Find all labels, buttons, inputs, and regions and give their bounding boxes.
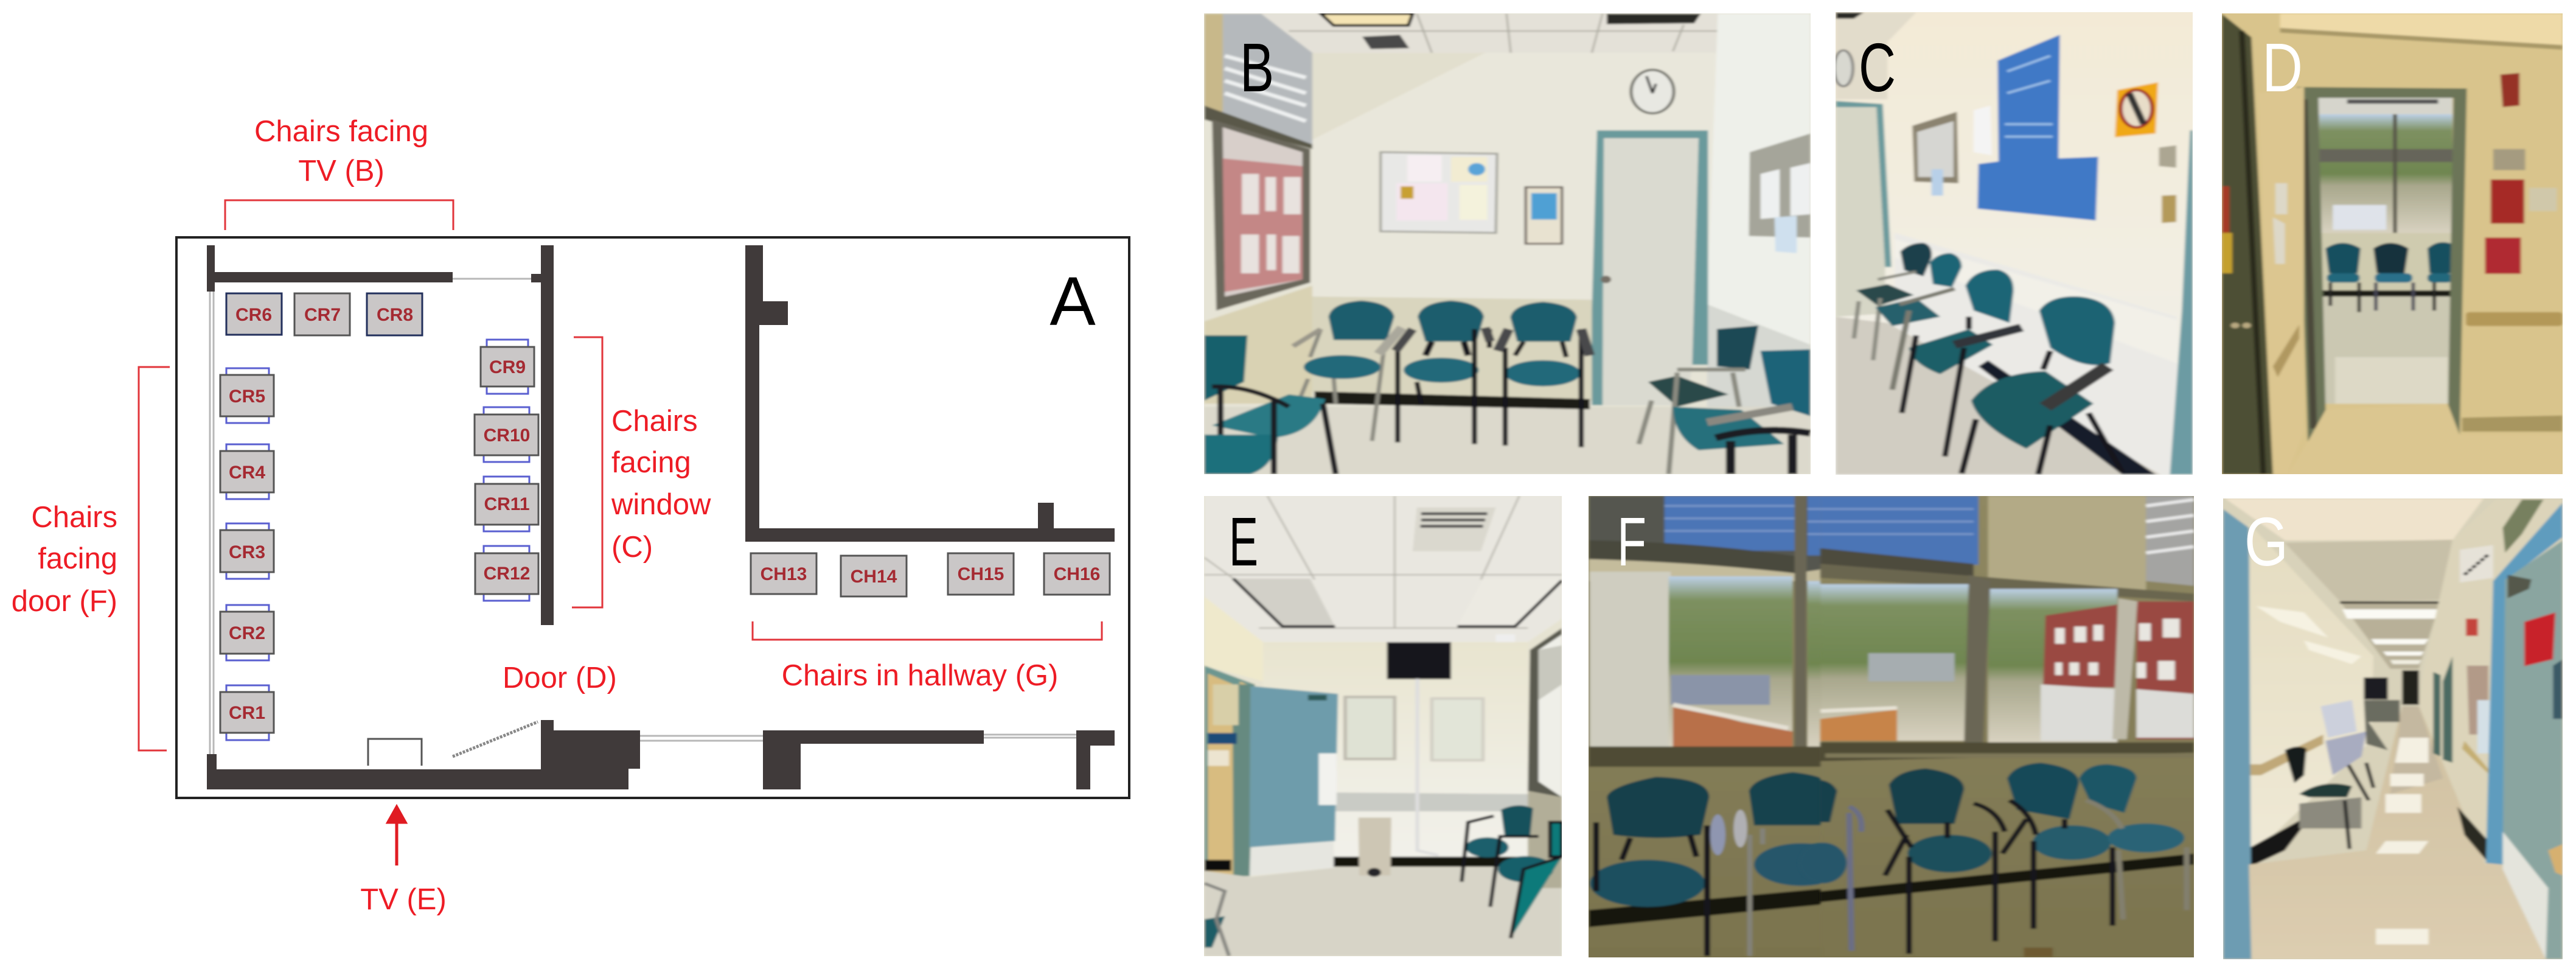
left half [1583,490,1865,963]
bracket: chairs facing window [572,337,602,607]
mullions [1964,575,1991,744]
far chairs [2325,243,2361,273]
chairs facing door: CR1 to CR5 [220,368,274,740]
arrow to TV [388,807,405,865]
label: TV: TV (E) [360,883,447,916]
floor plan frame [176,237,1129,798]
chairs in hallway: CH13 to CH16: CH16 [1054,564,1100,584]
left window with blind [1221,13,1314,145]
framed pictures [1345,697,1394,759]
label: chairs facing door: facing [38,542,117,575]
bracket: chairs in hallway [753,621,1102,640]
ceiling [1204,496,1562,642]
blinds [1820,496,1979,565]
handrail, baseboard and floor [2466,312,2563,326]
right half [1799,490,2199,963]
window view and column [1590,572,1671,747]
far room [2320,232,2453,292]
door frame [2297,87,2467,444]
chairs facing door: CR1 to CR5: CR4 [229,463,265,483]
clock [1631,70,1674,113]
panel letter E: E [1229,503,1258,580]
panel letter F: F [1617,503,1646,580]
chairs facing door: CR1 to CR5: CR2 [229,623,265,643]
label: chairs facing window: facing [611,446,691,479]
chairs facing window: CR9 to CR12: CR10 [484,425,530,446]
blue poster [1977,35,2098,220]
sill and baseboard [1820,743,2194,761]
chairs in hallway: CH13 to CH16: CH14 [851,567,897,587]
windows, door swing and trash outline [210,279,1076,766]
panel D: photo of door [2218,9,2567,478]
left opening and door [1204,666,1255,875]
left wall [2247,523,2373,860]
door [1592,130,1708,405]
walls [207,245,1115,789]
panel C: photo of chairs facing window [1830,9,2199,478]
left wall and back wall [1204,596,1263,681]
baseboard and floor [1334,857,1528,867]
label: chairs facing TV: TV (B) [298,155,385,187]
TV [1387,642,1451,679]
right door [2486,503,2563,864]
chairs in hallway: CH13 to CH16: CH13 [761,564,807,584]
lower walls and wainscot [1204,285,1312,404]
chairs [1501,805,1533,838]
chairs facing TV: CR6, CR7, CR8: CR6 [235,305,272,325]
panel G: photo of hallway [2220,495,2567,962]
no phone sign [2115,82,2158,138]
chairs in hallway: CH13 to CH16: CH15 [958,564,1004,584]
panel A: floor plan [12,115,1129,916]
exit sign and hanging sign [2460,545,2493,582]
notice board, paper and switches [1912,112,1958,183]
panel E: photo of TV wall [1199,490,1566,960]
chairs [1901,243,1932,276]
label: chairs facing window: Chairs [611,405,698,438]
blinds [1589,496,1862,581]
chairs facing TV: CR6, CR7, CR8: CR8 [377,305,413,325]
left door frame [2223,509,2251,959]
chairs facing window: CR9 to CR12: CR9 [489,357,526,377]
back wall and ceiling [1312,53,1718,301]
chairs and equipment [2285,747,2306,783]
trash bin [1359,817,1391,875]
chairs [1607,777,1709,838]
chairs facing window: CR9 to CR12 [475,340,538,601]
bracket: chairs facing door [139,367,170,750]
left door [1836,101,1892,267]
panel letter C: C [1859,29,1896,106]
right wall signage [2501,73,2519,107]
ceiling [2225,498,2484,540]
chairs facing window: CR9 to CR12: CR11 [484,494,530,514]
floor [2249,707,2548,959]
panel F: photo of chairs facing door [1583,490,2199,963]
label: chairs in hallway: Chairs in hallway (G) [782,659,1058,692]
chairs facing door: CR1 to CR5: CR3 [229,542,265,562]
far end of corridor [2402,670,2419,705]
chairs facing TV: CR6, CR7, CR8: CR7 [304,305,341,325]
chairs [1293,301,1402,441]
label: chairs facing window: (C) [611,531,653,564]
label: chairs facing window: window [611,488,711,521]
wainscot and floor [1895,233,2177,475]
bracket: chairs facing TV [225,200,453,230]
panel B: photo of chairs facing TV [1199,9,1818,478]
panel letter B: B [1240,29,1274,106]
chairs [1820,780,1837,822]
door edge [2170,130,2193,475]
ceiling [2280,13,2563,45]
chairs facing window: CR9 to CR12: CR12 [484,564,530,584]
ceiling and clock [1836,12,1916,99]
label: chairs facing door: Chairs [31,501,117,534]
window view [1820,584,1969,741]
panel letter G: G [2244,503,2288,580]
sill and baseboard [1589,746,1862,767]
label: chairs facing door: door (F) [12,585,117,618]
window [1528,628,1562,797]
chairs facing door: CR1 to CR5: CR5 [229,386,265,407]
chairs facing TV: CR6, CR7, CR8 [226,293,422,335]
notice boards [1380,152,1497,233]
left wall and door [2295,86,2307,314]
right wall [2419,500,2563,866]
panel letter D: D [2262,29,2303,106]
panel letter A: A [1050,263,1096,340]
chairs in hallway: CH13 to CH16 [751,553,1110,596]
chairs facing door: CR1 to CR5: CR1 [229,703,265,723]
label: chairs facing TV: Chairs facing [254,115,428,148]
label: door: Door (D) [503,662,617,694]
